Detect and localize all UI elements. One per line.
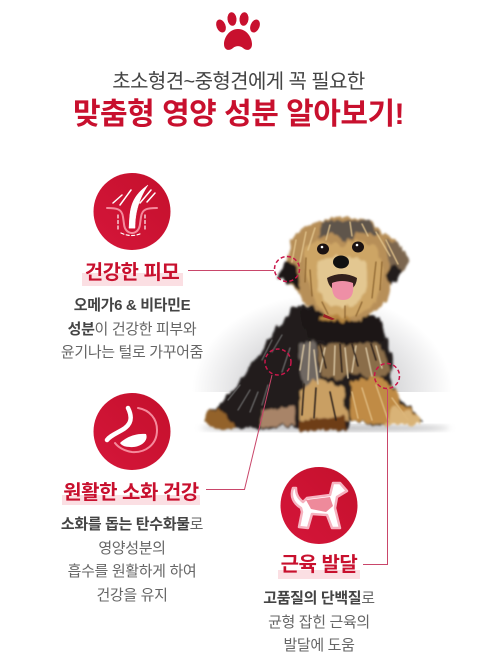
highlight: muscle <box>278 570 360 579</box>
text: digestion: 영양성분의 <box>98 540 166 557</box>
label: hair: 건강한 피모 <box>85 262 179 284</box>
text: hair: 성분이 건강한 피부와 <box>68 321 196 338</box>
text: hair: 윤기나는 털로 가꾸어줌 <box>61 344 203 361</box>
text: muscle: 발달에 도움 <box>283 637 355 654</box>
dog photo illustration <box>205 217 423 430</box>
label: muscle: 근육 발달 <box>281 554 357 576</box>
text: muscle: 고품질의 단백질로 <box>263 590 375 607</box>
backdrop gradient <box>190 262 460 432</box>
text: hair: 오메가6 & 비타민E <box>74 297 190 314</box>
icon: hair follicle <box>94 173 170 250</box>
text: hair <box>61 297 203 361</box>
text: digestion <box>61 516 203 604</box>
icon: paw <box>214 12 262 50</box>
text: digestion: 건강을 유지 <box>96 587 168 604</box>
text: digestion: 소화를 돕는 탄수화물로 <box>61 516 203 533</box>
subtitle: 초소형견~중형견에게 꼭 필요한 <box>112 71 365 93</box>
dog face <box>317 242 364 320</box>
highlight: hair <box>82 273 183 286</box>
label: digestion: 원활한 소화 건강 <box>63 482 199 504</box>
text: muscle <box>263 590 375 654</box>
pointer: muscle <box>363 364 400 564</box>
pointer: digestion <box>206 349 291 490</box>
title: 맞춤형 영양 성분 알아보기! <box>73 98 404 131</box>
icon: stomach <box>94 393 170 470</box>
highlight: digestion <box>62 495 200 505</box>
pointer: coat to label <box>188 256 300 282</box>
text: digestion: 흡수를 원활하게 하여 <box>68 563 196 580</box>
icon: dog muscle <box>280 467 358 544</box>
text: muscle: 균형 잡힌 근육의 <box>268 614 370 631</box>
